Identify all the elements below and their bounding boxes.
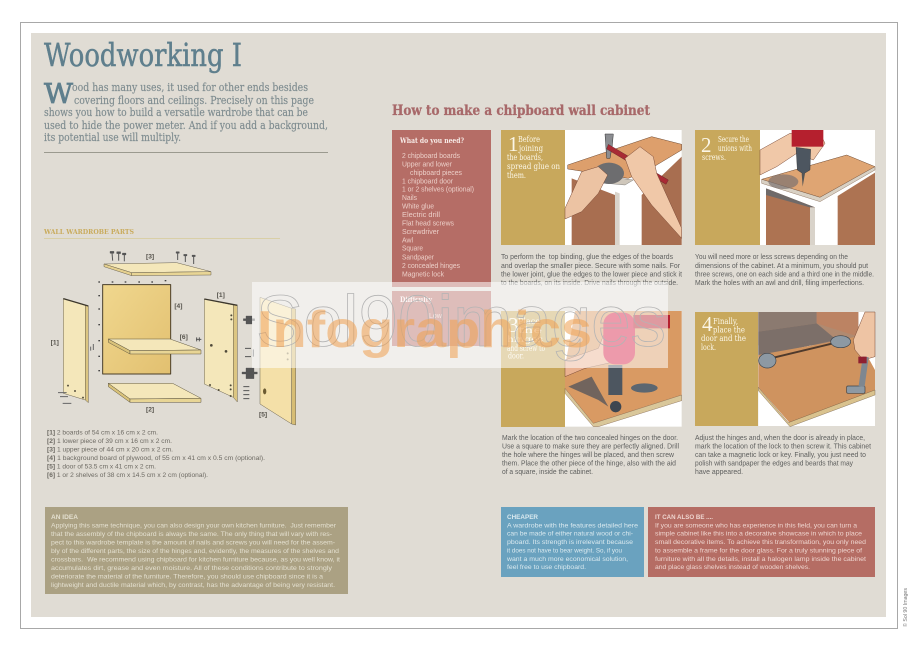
part 5: door <box>260 297 296 425</box>
step 2 text <box>695 254 874 287</box>
panel: difficulty: Low <box>429 313 443 320</box>
part 3: upper board <box>104 252 211 276</box>
panel: what do you need: Electric drill <box>402 212 440 219</box>
callout: cheaper: feel free to use chipboard. <box>507 564 586 571</box>
step 2 caption box: screws. <box>702 153 726 162</box>
step 1 caption box: 1 <box>508 132 518 156</box>
panel: what do you need: White glue <box>402 203 434 210</box>
part 4: plywood background board <box>98 280 171 374</box>
part labels <box>51 253 267 418</box>
callout: it can also be: to assemble a frame for the door glass. For a truly stunning piece of <box>655 548 862 554</box>
step 1 caption box: them. <box>507 171 526 180</box>
step 2 text: dimensions of the cabinet. At a minimum, you should put <box>695 263 868 270</box>
drop cap: W <box>44 79 73 110</box>
part 2: lower board <box>108 383 201 402</box>
callout: an idea: accumulates dirt, grease and even moisture. All of these conditions contribute to strongly <box>51 565 333 572</box>
intro text lines: ood has many uses, it used for other ends besides <box>72 80 308 94</box>
callout: cheaper <box>501 507 644 577</box>
callout: an idea: Applying this same technique, you can also design your own kitchen furniture. Just remember <box>51 522 337 530</box>
callout: cheaper: A wardrobe with the features detailed here <box>507 522 638 530</box>
step 1 caption box: the boards, <box>507 153 543 162</box>
panel: what do you need <box>392 130 491 287</box>
step 2 text: three screws, one on each side and a third one in the middle. <box>695 272 874 278</box>
callout: it can also be: and place glass shelves instead of wooden shelves. <box>655 564 810 571</box>
parts list: [4] 1 background board of plywood, of 55 cm x 41 cm x 0.5 cm (optional). <box>47 455 265 462</box>
panel: difficulty: Difficulty <box>400 295 433 304</box>
step 3 text: Use a square to make sure they are perfectly aligned. Drill <box>502 444 679 450</box>
part labels: [5] <box>259 411 267 418</box>
callout: it can also be: small decorative items. To achieve this transformation, you only need <box>655 539 866 546</box>
step 1 caption box <box>501 130 565 245</box>
step 1 text: the lower joint, glue the edges to the lower piece and stick it <box>501 272 682 278</box>
callout: it can also be: IT CAN ALSO BE .... <box>655 514 713 521</box>
panel: what do you need: 1 chipboard door <box>402 178 454 185</box>
step 3 illustration: drilling hinges on the door <box>565 311 682 427</box>
parts heading: WALL WARDROBE PARTS <box>43 229 134 236</box>
intro text lines: its potential use will multiply. <box>44 130 181 144</box>
callout: an idea <box>45 507 348 594</box>
hinges and lock hardware <box>242 316 257 399</box>
step 4 caption box: door and the <box>701 334 746 343</box>
panel: what do you need: Nails <box>402 195 417 202</box>
callout: cheaper: pboard. Its strength is irrelevant because <box>507 539 633 546</box>
callout: an idea: crossbars. We recommend using chipboard for kitchen furniture because, as you well know, it <box>51 556 340 564</box>
parts list: [2] 1 lower piece of 39 cm x 16 cm x 2 cm. <box>47 438 172 445</box>
step 4 <box>695 312 875 476</box>
step 4 caption box: Finally, <box>713 317 738 326</box>
parts list: [6] 1 or 2 shelves of 38 cm x 14.5 cm x 2 cm (optional). <box>47 472 208 479</box>
part labels: [3] <box>146 253 154 260</box>
exploded diagram of the wardrobe parts <box>51 252 296 425</box>
step 2 caption box: Secure the <box>718 135 749 144</box>
step 2 <box>695 130 875 287</box>
step 1 illustration: hammering nails <box>565 130 682 245</box>
panel: what do you need: 2 chipboard boards <box>402 153 460 160</box>
panel: what do you need: 2 concealed hinges <box>402 263 460 270</box>
step 3 text: them. Place the other piece of the hinge, also with the aid <box>502 460 676 468</box>
step 4 illustration: door with hinges and lock <box>758 312 875 427</box>
intro paragraph <box>44 79 328 144</box>
step 3 caption box <box>501 311 565 427</box>
step 4 text <box>695 435 871 476</box>
panel: what do you need: 1 or 2 shelves (optional) <box>402 187 474 194</box>
step 3 caption box: door. <box>508 352 524 360</box>
step 2 caption box: unions with <box>718 144 752 153</box>
part 1: left side board <box>58 299 93 403</box>
step 4 text: can take a magnetic lock or key. Finally, you just need to <box>695 452 866 459</box>
intro text lines: used to hide the power meter. And if you add a background, <box>44 118 328 132</box>
step 3 <box>501 311 682 476</box>
callout: it can also be: furniture with all the details, install a halogen lamp inside the cabinet <box>655 556 866 563</box>
parts list <box>47 430 265 479</box>
step 3 caption box: Place <box>518 317 540 326</box>
step 3 caption box: and screw to <box>507 344 545 353</box>
parts list: [1] 2 boards of 54 cm x 16 cm x 2 cm. <box>47 430 158 436</box>
part labels: [2] <box>146 406 154 413</box>
step 3 caption box: hinges <box>507 335 543 344</box>
step 2 illustration: drilling screws <box>760 130 875 245</box>
step 2 caption box <box>695 130 760 245</box>
panel: what do you need: Upper and lower <box>402 162 453 168</box>
step 4 text: polish with sandpaper the edges and beards that may <box>695 460 853 468</box>
parts list: [3] 1 upper piece of 44 cm x 20 cm x 2 cm. <box>47 446 173 454</box>
callout: it can also be <box>648 507 875 577</box>
intro text lines: shows you how to build a versatile wardrobe that can be <box>44 105 308 119</box>
step 3 text: Mark the location of the two concealed hinges on the door. <box>502 435 678 442</box>
panel: difficulty <box>392 291 491 346</box>
step 1 text: to the boards, on its inside. Drive nails through the outside. <box>501 280 678 287</box>
callout: an idea: AN IDEA <box>51 514 78 521</box>
callout: an idea: pect to this wardrobe template is the amount of nails and screws you will need for the assem- <box>51 540 335 546</box>
panel: what do you need: Screwdriver <box>402 229 440 236</box>
callout: cheaper: can be made of either natural wood or chi- <box>507 530 633 538</box>
watermark: Infographics <box>257 301 592 359</box>
part labels: [1] <box>51 340 59 347</box>
step 3 caption box: 3 <box>508 313 518 337</box>
image credit: © Sol 90 Images <box>902 587 909 627</box>
panel: what do you need: Magnetic lock <box>402 271 444 278</box>
step 4 caption box <box>695 312 758 426</box>
step 1 text: and overlap the smaller piece. Secure with some nails. For <box>501 263 681 270</box>
callout: it can also be: If you are someone who has experience in this field, you can turn a <box>655 522 857 530</box>
part labels: [4] <box>174 303 182 310</box>
step 3 text: of a square, inside the cabinet. <box>502 469 593 476</box>
panel: what do you need: Awl <box>402 237 413 244</box>
callout: cheaper: want a much more economical solution, <box>506 556 628 563</box>
intro text lines: covering floors and ceilings. Precisely on this page <box>74 93 314 107</box>
part 1: right side board <box>196 299 237 402</box>
callout: an idea: deteriorate the material of the furniture. Therefore, you should use chipboard since it is a <box>51 574 323 580</box>
step 4 caption box: place the <box>713 326 745 334</box>
step 2 text: You will need more or less screws depending on the <box>695 254 848 261</box>
step 4 caption box: lock. <box>701 343 716 352</box>
step 1 <box>501 130 682 287</box>
step 1 text: To perform the top binding, glue the edges of the boards <box>501 254 673 261</box>
callout: an idea: lightweight and ductile material which, by contrast, has the advantage of being very resistant. <box>51 582 335 589</box>
panel: what do you need: Sandpaper <box>402 254 435 261</box>
step 3 text: the hole where the hinges will be placed, and then screw <box>502 452 675 459</box>
title: Woodworking I <box>44 36 242 74</box>
step 4 text: have appeared. <box>695 469 743 476</box>
panel: what do you need: Flat head screws <box>402 220 454 227</box>
parts list: [5] 1 door of 53.5 cm x 41 cm x 2 cm. <box>47 464 156 470</box>
section heading: How to make a chipboard wall cabinet <box>392 103 650 119</box>
part labels: [1] <box>217 292 225 299</box>
step 1 caption box: spread glue on <box>507 162 560 171</box>
part 6: shelf <box>108 339 201 354</box>
step 2 caption box: 2 <box>701 133 712 157</box>
intro text lines <box>44 80 328 144</box>
callout: an idea: that the assembly of the chipboard is always the same. The only thing that will vary with res- <box>51 531 332 538</box>
callout: it can also be: simple cabinet like this into a decorative showcase in which to place <box>655 530 862 538</box>
step 4 text: Adjust the hinges and, when the door is already in place, <box>695 435 865 442</box>
step 1 caption box: joining <box>518 144 543 153</box>
step 4 caption box: 4 <box>702 312 713 336</box>
callout: cheaper: it does not have to bear weight. So, if you <box>507 548 622 554</box>
step 2 text: Mark the holes with an awl and drill, filing imperfections. <box>695 280 864 287</box>
callout: cheaper: CHEAPER <box>507 514 538 521</box>
panel: what do you need: chipboard pieces <box>410 170 462 177</box>
step 3 text <box>502 435 679 476</box>
callout: an idea: bly of the different parts, the size of the hinges and, evidently, the measures of the shelves and <box>51 548 339 555</box>
part labels: [6] <box>180 334 188 341</box>
watermark: Sol90images <box>256 282 666 362</box>
panel: what do you need: What do you need? <box>399 136 464 145</box>
step 4 text: mark the location of the lock to then screw it. This cabinet <box>695 444 871 450</box>
step 1 text <box>501 254 682 287</box>
panel: what do you need: Square <box>402 246 423 253</box>
step 3 caption box: the <box>518 326 542 335</box>
step 1 caption box: Before <box>518 135 540 144</box>
